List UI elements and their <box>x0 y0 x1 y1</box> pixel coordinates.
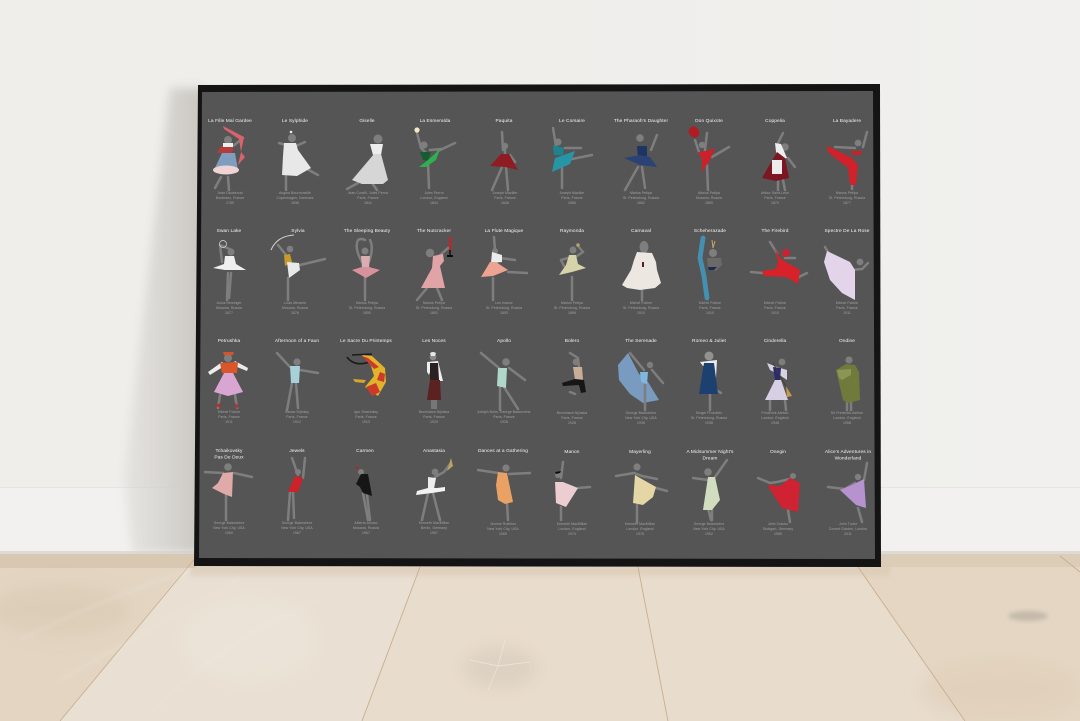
caption: Paris, France <box>423 415 445 419</box>
title: Bolero <box>565 338 579 344</box>
caption: Joseph Mazilier <box>492 191 518 195</box>
figure <box>826 132 867 189</box>
figure <box>824 247 868 300</box>
figure <box>481 237 527 300</box>
title: The Serenade <box>625 338 657 344</box>
caption: Marius Petipa <box>836 191 858 195</box>
caption: Paris, France <box>493 415 515 419</box>
caption: 1846 <box>501 201 509 205</box>
figure <box>417 237 453 300</box>
caption: Kenneth MacMillan <box>557 522 587 526</box>
caption: Paris, France <box>286 415 308 419</box>
caption: Kenneth MacMillan <box>419 521 449 525</box>
caption: John Tudor <box>839 522 858 526</box>
caption: St. Petersburg, Russia <box>691 416 727 420</box>
caption: 1893 <box>500 311 508 315</box>
caption: New York City, USA <box>213 526 245 530</box>
panel: The Serenade <box>618 338 663 425</box>
title: Sylvia <box>291 228 305 234</box>
caption: Julius Reisinger <box>216 301 243 305</box>
caption: Paris, France <box>494 196 516 200</box>
caption: Lev Ivanov <box>495 301 513 305</box>
panel: Petrushka <box>208 338 248 424</box>
caption: 1974 <box>568 532 576 536</box>
caption: New York City, USA <box>693 527 725 531</box>
figure <box>616 463 667 522</box>
caption: 1911 <box>843 311 851 315</box>
caption: Berlin, Germany <box>421 526 447 530</box>
title: Don Quixote <box>695 118 723 124</box>
panel: Les Noces <box>419 338 449 424</box>
title: Coppelia <box>765 118 785 124</box>
panel: Anastasia <box>416 448 453 535</box>
title: Anastasia <box>423 448 445 454</box>
panel: The Sleeping Beauty <box>344 228 391 315</box>
figure <box>427 352 443 409</box>
panel: La Fille Mal Gardee <box>208 118 252 205</box>
caption: Paris, France <box>355 415 377 419</box>
panel: A Midsummer Night's Dream <box>686 449 734 536</box>
figure <box>700 238 722 298</box>
caption: London, England <box>833 416 861 420</box>
title: Scheherazade <box>694 228 726 234</box>
figure <box>478 464 530 520</box>
caption: Michel Fokine <box>630 301 652 305</box>
caption: George Balanchine <box>282 521 312 525</box>
wall background <box>0 0 1080 490</box>
title: Giselle <box>359 118 375 124</box>
caption: 1938 <box>705 421 713 425</box>
caption: 1856 <box>568 201 576 205</box>
caption: 1870 <box>771 201 779 205</box>
title: La Flute Magique <box>485 228 524 234</box>
title: Afternoon of a Faun <box>275 338 319 344</box>
caption: Louis Merante <box>284 301 306 305</box>
panel: La Sylphide <box>277 118 318 205</box>
caption: 1967 <box>293 531 301 535</box>
figure <box>693 460 727 520</box>
title: The Nutcracker <box>417 228 451 234</box>
caption: Jerome Robbins <box>490 522 516 526</box>
caption: Stuttgart, Germany <box>763 527 793 531</box>
skirting board <box>0 487 1080 555</box>
title: Les Noces <box>422 338 446 344</box>
caption: 1913 <box>362 420 370 424</box>
title: Romeo & Juliet <box>692 338 727 344</box>
title: Manon <box>564 449 580 455</box>
figure <box>624 134 657 190</box>
caption: Bronislava Nijinska <box>419 410 449 414</box>
panel: Carnaval <box>622 228 661 315</box>
figure <box>416 458 453 520</box>
panel: Ondine <box>831 338 863 425</box>
caption: 1965 <box>774 532 782 536</box>
panel: Dances at a Gathering <box>478 448 530 536</box>
caption: Moscow, Russia <box>216 306 242 310</box>
caption: St. Petersburg, Russia <box>349 306 385 310</box>
title: The Firebird <box>761 228 789 234</box>
panel: Alice's Adventures in Wonderland <box>825 449 871 536</box>
figure <box>751 242 807 284</box>
caption: Alberto Alonso <box>354 521 378 525</box>
caption: Moscow, Russia <box>282 306 308 310</box>
panel: Tchaikovsky Pas De Deux <box>204 448 252 535</box>
title: Le Sacre Du Printemps <box>340 338 392 344</box>
panel: Manon <box>555 449 590 536</box>
panel: Swan Lake <box>213 228 246 315</box>
panel: Sylvia <box>271 228 325 315</box>
caption: Igor Stravinsky <box>354 410 378 414</box>
title: Wonderland <box>835 456 862 462</box>
caption: 1862 <box>637 201 645 205</box>
panel: Giselle <box>347 118 388 205</box>
panel: Coppelia <box>761 118 795 205</box>
caption: 1869 <box>705 201 713 205</box>
panel: Raymonda <box>554 228 590 315</box>
caption: St. Petersburg, Russia <box>623 306 659 310</box>
title: A Midsummer Night's <box>686 449 734 455</box>
title: Raymonda <box>560 228 584 234</box>
caption: 2011 <box>844 532 852 536</box>
panel: The Firebird <box>751 228 807 315</box>
title: Le Sylphide <box>282 118 308 124</box>
caption: Jean Dauberval <box>217 191 243 195</box>
caption: 1935 <box>637 421 645 425</box>
caption: London, England <box>558 527 586 531</box>
caption: 1912 <box>293 420 301 424</box>
caption: 1948 <box>771 421 779 425</box>
caption: Michel Fokine <box>836 301 858 305</box>
panel: The Pharaoh's Daughter <box>614 118 668 205</box>
caption: 1978 <box>636 532 644 536</box>
caption: Paris, France <box>764 196 786 200</box>
caption: George Balanchine <box>626 411 656 415</box>
title: Apollo <box>497 338 511 344</box>
title: The Pharaoh's Daughter <box>614 118 668 124</box>
figure <box>559 243 586 300</box>
caption: London, England <box>420 196 448 200</box>
caption: 1892 <box>430 311 438 315</box>
figure <box>288 458 305 520</box>
panel: Mayerling <box>616 449 667 536</box>
caption: Paris, France <box>561 196 583 200</box>
caption: 1928 <box>568 421 576 425</box>
figure <box>618 353 663 410</box>
caption: Paris, France <box>218 415 240 419</box>
caption: Copenhagen, Denmark <box>277 196 314 200</box>
caption: Marius Petipa <box>423 301 445 305</box>
title: Tchaikovsky <box>216 448 243 454</box>
caption: 1911 <box>225 420 233 424</box>
caption: Marius Petipa <box>561 301 583 305</box>
caption: St. Petersburg, Russia <box>486 306 522 310</box>
panel: Apollo <box>477 338 531 424</box>
figure <box>347 134 388 190</box>
caption: 1910 <box>706 311 714 315</box>
caption: 1967 <box>362 531 370 535</box>
caption: Joseph Mazilier <box>559 191 585 195</box>
title: La Fille Mal Gardee <box>208 118 252 124</box>
caption: Paris, France <box>699 306 721 310</box>
panel: Paquita <box>490 118 518 205</box>
caption: Michel Fokine <box>218 410 240 414</box>
figure <box>490 132 518 190</box>
title: Carmen <box>356 448 374 454</box>
caption: Bordeaux, France <box>216 196 244 200</box>
figure <box>481 353 525 410</box>
caption: 1844 <box>430 201 438 205</box>
caption: 1928 <box>500 420 508 424</box>
caption: John Cranko <box>768 522 788 526</box>
caption: Marius Petipa <box>698 191 720 195</box>
figure <box>762 133 795 190</box>
figure <box>552 128 592 188</box>
poster background <box>199 91 875 559</box>
caption: Jules Perrot <box>424 191 444 195</box>
caption: St. Petersburg, Russia <box>416 306 452 310</box>
caption: Sergei Prokofiev <box>696 411 722 415</box>
caption: 1789 <box>226 201 234 205</box>
caption: Kenneth MacMillan <box>625 522 655 526</box>
figure <box>279 131 318 190</box>
title: La Esmeralda <box>420 118 451 124</box>
panel: Le Sacre Du Printemps <box>340 338 392 424</box>
figure <box>562 353 586 394</box>
title: Onegin <box>770 449 786 455</box>
panel: Afternoon of a Faun <box>275 338 319 424</box>
caption: Jean Coralli, Jules Perrot <box>348 191 388 195</box>
title: Paquita <box>496 118 513 124</box>
caption: 1841 <box>364 201 372 205</box>
title: The Sleeping Beauty <box>344 228 391 234</box>
caption: 1958 <box>843 421 851 425</box>
caption: Michel Fokine <box>764 301 786 305</box>
figure <box>352 239 380 300</box>
panel: Bolero <box>557 338 587 425</box>
panel: Carmen <box>353 448 379 535</box>
panel: Don Quixote <box>687 118 729 205</box>
caption: 1877 <box>843 201 851 205</box>
caption: Vaslav Nijinsky <box>285 410 309 414</box>
caption: Frederick Ashton <box>761 411 789 415</box>
caption: 1876 <box>291 311 299 315</box>
figure <box>622 241 661 300</box>
poster frame <box>194 84 881 567</box>
figure <box>836 356 860 410</box>
panel: La Bayadere <box>826 118 867 205</box>
figure <box>555 462 590 520</box>
panel: La Flute Magique <box>481 228 527 315</box>
title: Cinderella <box>764 338 787 344</box>
caption: 1890 <box>363 311 371 315</box>
caption: 1967 <box>430 531 438 535</box>
title: Swan Lake <box>217 228 242 234</box>
caption: London, England <box>761 416 789 420</box>
caption: New York City, USA <box>487 527 519 531</box>
figure <box>204 463 252 520</box>
caption: London, England <box>626 527 654 531</box>
caption: 1962 <box>705 532 713 536</box>
caption: 1898 <box>568 311 576 315</box>
caption: Arthur Saint-Leon <box>761 191 789 195</box>
caption: Marius Petipa <box>356 301 378 305</box>
figure <box>828 463 867 522</box>
caption: 1877 <box>225 311 233 315</box>
caption: St. Petersburg, Russia <box>554 306 590 310</box>
poster grid of ballets <box>204 118 871 536</box>
title: Dances at a Gathering <box>478 448 528 454</box>
caption: Paris, France <box>764 306 786 310</box>
title: Alice's Adventures in <box>825 449 871 455</box>
caption: New York City, USA <box>625 416 657 420</box>
panel: Jewels <box>281 448 313 535</box>
caption: Bronislava Nijinska <box>557 411 587 415</box>
figure <box>765 359 792 410</box>
panel: The Nutcracker <box>416 228 453 315</box>
figure <box>277 353 318 410</box>
title: Mayerling <box>629 449 651 455</box>
figure <box>271 235 325 300</box>
caption: George Balanchine <box>694 522 724 526</box>
panel: Spectre De La Rose <box>824 228 870 315</box>
caption: Moscow, Russia <box>353 526 379 530</box>
caption: George Balanchine <box>214 521 244 525</box>
figure <box>213 126 245 190</box>
title: La Bayadere <box>833 118 861 124</box>
caption: Sir Frederick Ashton <box>831 411 863 415</box>
panel: Cinderella <box>761 338 792 425</box>
caption: 1960 <box>225 531 233 535</box>
wooden floor <box>0 554 1080 721</box>
figure <box>347 354 386 396</box>
caption: Marius Petipa <box>630 191 652 195</box>
caption: 1969 <box>499 532 507 536</box>
caption: St. Petersburg, Russia <box>623 196 659 200</box>
title: Jewels <box>289 448 305 454</box>
caption: 1910 <box>771 311 779 315</box>
figure <box>414 127 455 188</box>
panel: Romeo & Juliet <box>691 338 727 425</box>
caption: St. Petersburg, Russia <box>829 196 865 200</box>
figure <box>758 473 800 522</box>
caption: 1836 <box>291 201 299 205</box>
title: Petrushka <box>218 338 240 344</box>
caption: Paris, France <box>357 196 379 200</box>
title: Spectre De La Rose <box>824 228 870 234</box>
caption: Paris, France <box>561 416 583 420</box>
figure <box>356 467 372 520</box>
caption: Covent Garden, London <box>829 527 867 531</box>
panel: Le Corsaire <box>552 118 592 205</box>
panel: La Esmeralda <box>414 118 455 205</box>
panel: Onegin <box>758 449 800 536</box>
caption: New York City, USA <box>281 526 313 530</box>
title: Le Corsaire <box>559 118 585 124</box>
figure <box>687 124 729 190</box>
caption: 1910 <box>637 311 645 315</box>
caption: Michel Fokine <box>699 301 721 305</box>
title: Pas De Deux <box>214 454 244 460</box>
caption: Paris, France <box>836 306 858 310</box>
title: Dream <box>703 456 717 462</box>
caption: 1923 <box>430 420 438 424</box>
caption: Adolph Bolm, George Balanchine <box>477 410 531 414</box>
panel: Scheherazade <box>694 228 726 315</box>
figure <box>699 352 721 410</box>
wall shadow behind poster <box>124 88 205 553</box>
figure <box>208 352 248 409</box>
caption: August Bournonville <box>279 191 311 195</box>
caption: Moscow, Russia <box>696 196 722 200</box>
title: Ondine <box>839 338 855 344</box>
figure <box>213 240 246 300</box>
title: Carnaval <box>631 228 651 234</box>
